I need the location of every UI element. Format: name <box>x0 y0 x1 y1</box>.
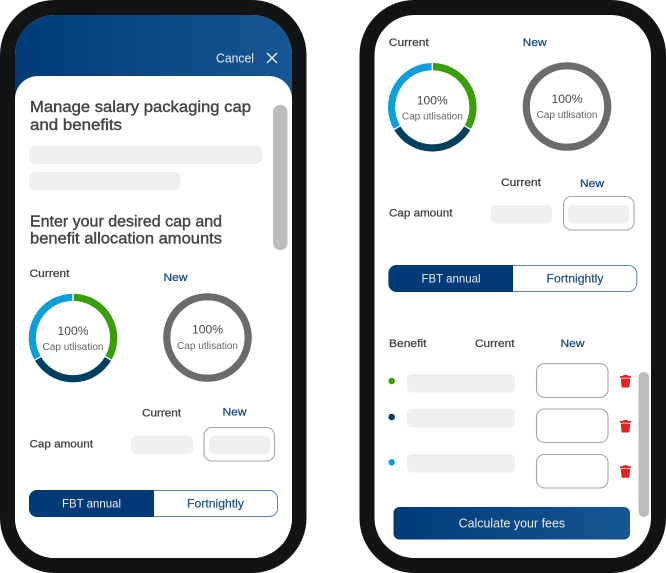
phone: right screen <box>360 0 666 573</box>
heading: manage cap: and benefits <box>30 117 122 134</box>
cancel action <box>216 52 277 66</box>
label: new: New <box>523 37 548 49</box>
icon: trash <box>620 465 631 478</box>
button: calculate your fees: Calculate your fees <box>459 516 565 530</box>
donut: new cap <box>526 66 608 147</box>
donut: new cap: 100% <box>551 94 583 106</box>
donut: new cap: Cap utlisation <box>177 341 238 352</box>
donut: current cap <box>32 297 114 379</box>
cap amount row <box>30 406 274 461</box>
donut: current cap: Cap utlisation <box>43 342 103 353</box>
benefit row 1 <box>388 364 631 398</box>
input: new amount <box>536 454 608 488</box>
cap amount row: Current <box>142 408 182 420</box>
label: current: Current <box>389 37 430 49</box>
benefit table header: Current <box>475 338 515 350</box>
placeholder text lines <box>29 146 262 190</box>
toggle: FBT annual / fortnightly: FBT annual <box>62 496 121 510</box>
label: current: Current <box>30 268 70 280</box>
scrollbar <box>273 105 288 250</box>
cap amount row: Cap amount <box>389 208 453 220</box>
cancel action: Cancel <box>216 52 254 66</box>
toggle: FBT annual / fortnightly: Fortnightly <box>546 272 604 286</box>
toggle: FBT annual / fortnightly <box>388 265 637 292</box>
header band <box>15 15 292 566</box>
icon: trash <box>620 375 631 388</box>
donut: new cap: Cap utlisation <box>537 110 597 121</box>
cap amount row: New <box>222 406 247 418</box>
heading: desired allocation <box>30 214 222 248</box>
benefit table header: Benefit <box>389 338 427 350</box>
cap amount row <box>389 177 634 230</box>
cap amount row: Cap amount <box>30 438 94 450</box>
donut: current cap: Cap utlisation <box>402 112 463 123</box>
heading: manage cap <box>30 99 251 134</box>
toggle: FBT annual / fortnightly: FBT annual <box>422 272 480 286</box>
scrollbar <box>638 372 649 517</box>
phone: left screen <box>0 0 306 573</box>
benefit table header <box>389 338 585 350</box>
donut: current cap <box>392 67 473 148</box>
benefit row 2 <box>388 409 631 442</box>
label: new: New <box>164 272 188 284</box>
heading: desired allocation: benefit allocation amounts <box>30 230 222 248</box>
donut: current cap: 100% <box>417 96 448 108</box>
input: new amount <box>536 409 608 442</box>
toggle: FBT annual / fortnightly <box>29 490 278 517</box>
benefit table header: New <box>560 338 585 350</box>
donut: new cap: 100% <box>192 324 223 336</box>
benefit row 3 <box>388 454 631 488</box>
heading: desired allocation: Enter your desired cap and <box>30 214 222 230</box>
heading: manage cap: Manage salary packaging cap <box>30 99 251 116</box>
toggle: FBT annual / fortnightly: Fortnightly <box>187 496 244 510</box>
cap amount row: New <box>580 178 605 190</box>
button: calculate your fees <box>394 507 630 540</box>
donut: new cap <box>167 297 248 378</box>
icon: trash <box>620 420 631 433</box>
donut: current cap: 100% <box>57 326 89 338</box>
cap amount row: Current <box>501 177 542 189</box>
